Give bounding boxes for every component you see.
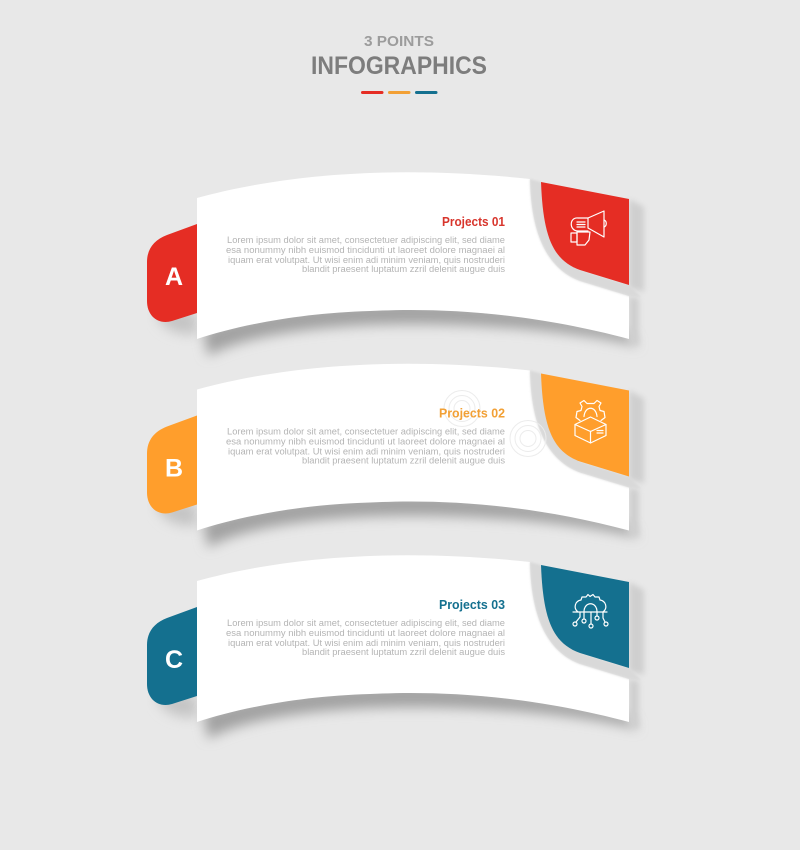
body text: Lorem ipsum dolor sit amet, consectetuer adipiscing elit, sed diame: [227, 426, 505, 438]
body text: [226, 618, 505, 658]
card shadow: [203, 685, 638, 739]
fold shadow: [530, 370, 641, 488]
icon: cloud gear circuit: [573, 594, 608, 628]
body text: iquam erat volutpat. Ut wisi enim adi minim veniam, quis nostruderi: [228, 638, 505, 649]
title: [311, 34, 487, 92]
letter B: B: [165, 454, 183, 482]
panel: B: [147, 364, 644, 548]
icon: megaphone: [571, 211, 606, 245]
letter A: A: [165, 263, 183, 291]
body text: Lorem ipsum dolor sit amet, consectetuer adipiscing elit, sed diame: [227, 235, 505, 246]
tab A: [147, 224, 197, 322]
body text: esa nonummy nibh euismod tincidunti ut laoreet dolore magnaei al: [226, 245, 505, 256]
tab shadow: [155, 502, 197, 526]
icon: gear and box: [575, 400, 606, 443]
body text: iquam erat volutpat. Ut wisi enim adi minim veniam, quis nostruderi: [228, 255, 505, 266]
heading: Projects 02: Projects 02: [439, 406, 505, 420]
tab shadow: [155, 693, 197, 717]
body text: esa nonummy nibh euismod tincidunti ut laoreet dolore magnaei al: [226, 628, 505, 639]
side shadow: [629, 390, 644, 538]
tab C: [147, 607, 197, 705]
body text: Lorem ipsum dolor sit amet, consectetuer adipiscing elit, sed diame: [227, 618, 505, 629]
colour dashes: [362, 91, 436, 94]
body text: iquam erat volutpat. Ut wisi enim adi minim veniam, quis nostruderi: [228, 446, 505, 458]
panel: C: [147, 555, 644, 739]
orange corner: [541, 374, 629, 476]
red corner: [541, 182, 629, 285]
card shadow: [203, 494, 638, 548]
heading: Projects 01: Projects 01: [442, 215, 505, 229]
white card: [197, 364, 629, 530]
white card: [197, 555, 629, 722]
fold shadow: [530, 562, 641, 680]
body text: [226, 426, 505, 466]
heading: Projects 03: Projects 03: [439, 598, 505, 612]
tab shadow: [155, 310, 197, 334]
side shadow: [629, 582, 644, 729]
panel: A: [147, 172, 644, 356]
letter C: C: [165, 646, 183, 674]
body text: blandit praesent luptatum zzril delenit augue duis: [302, 647, 505, 658]
body text: blandit praesent luptatum zzril delenit augue duis: [302, 264, 505, 275]
fold shadow: [530, 179, 641, 297]
side shadow: [629, 199, 644, 346]
subtitle: 3 POINTS: [364, 34, 434, 50]
tab B: [147, 416, 197, 513]
body text: blandit praesent luptatum zzril delenit augue duis: [302, 456, 505, 466]
body text: esa nonummy nibh euismod tincidunti ut laoreet dolore magnaei al: [226, 436, 505, 448]
body text: [226, 235, 505, 275]
card shadow: [203, 302, 638, 356]
heading: INFOGRAPHICS: [311, 52, 487, 80]
watermark rings: [444, 390, 546, 456]
white card: [197, 172, 629, 339]
teal corner: [541, 565, 629, 668]
